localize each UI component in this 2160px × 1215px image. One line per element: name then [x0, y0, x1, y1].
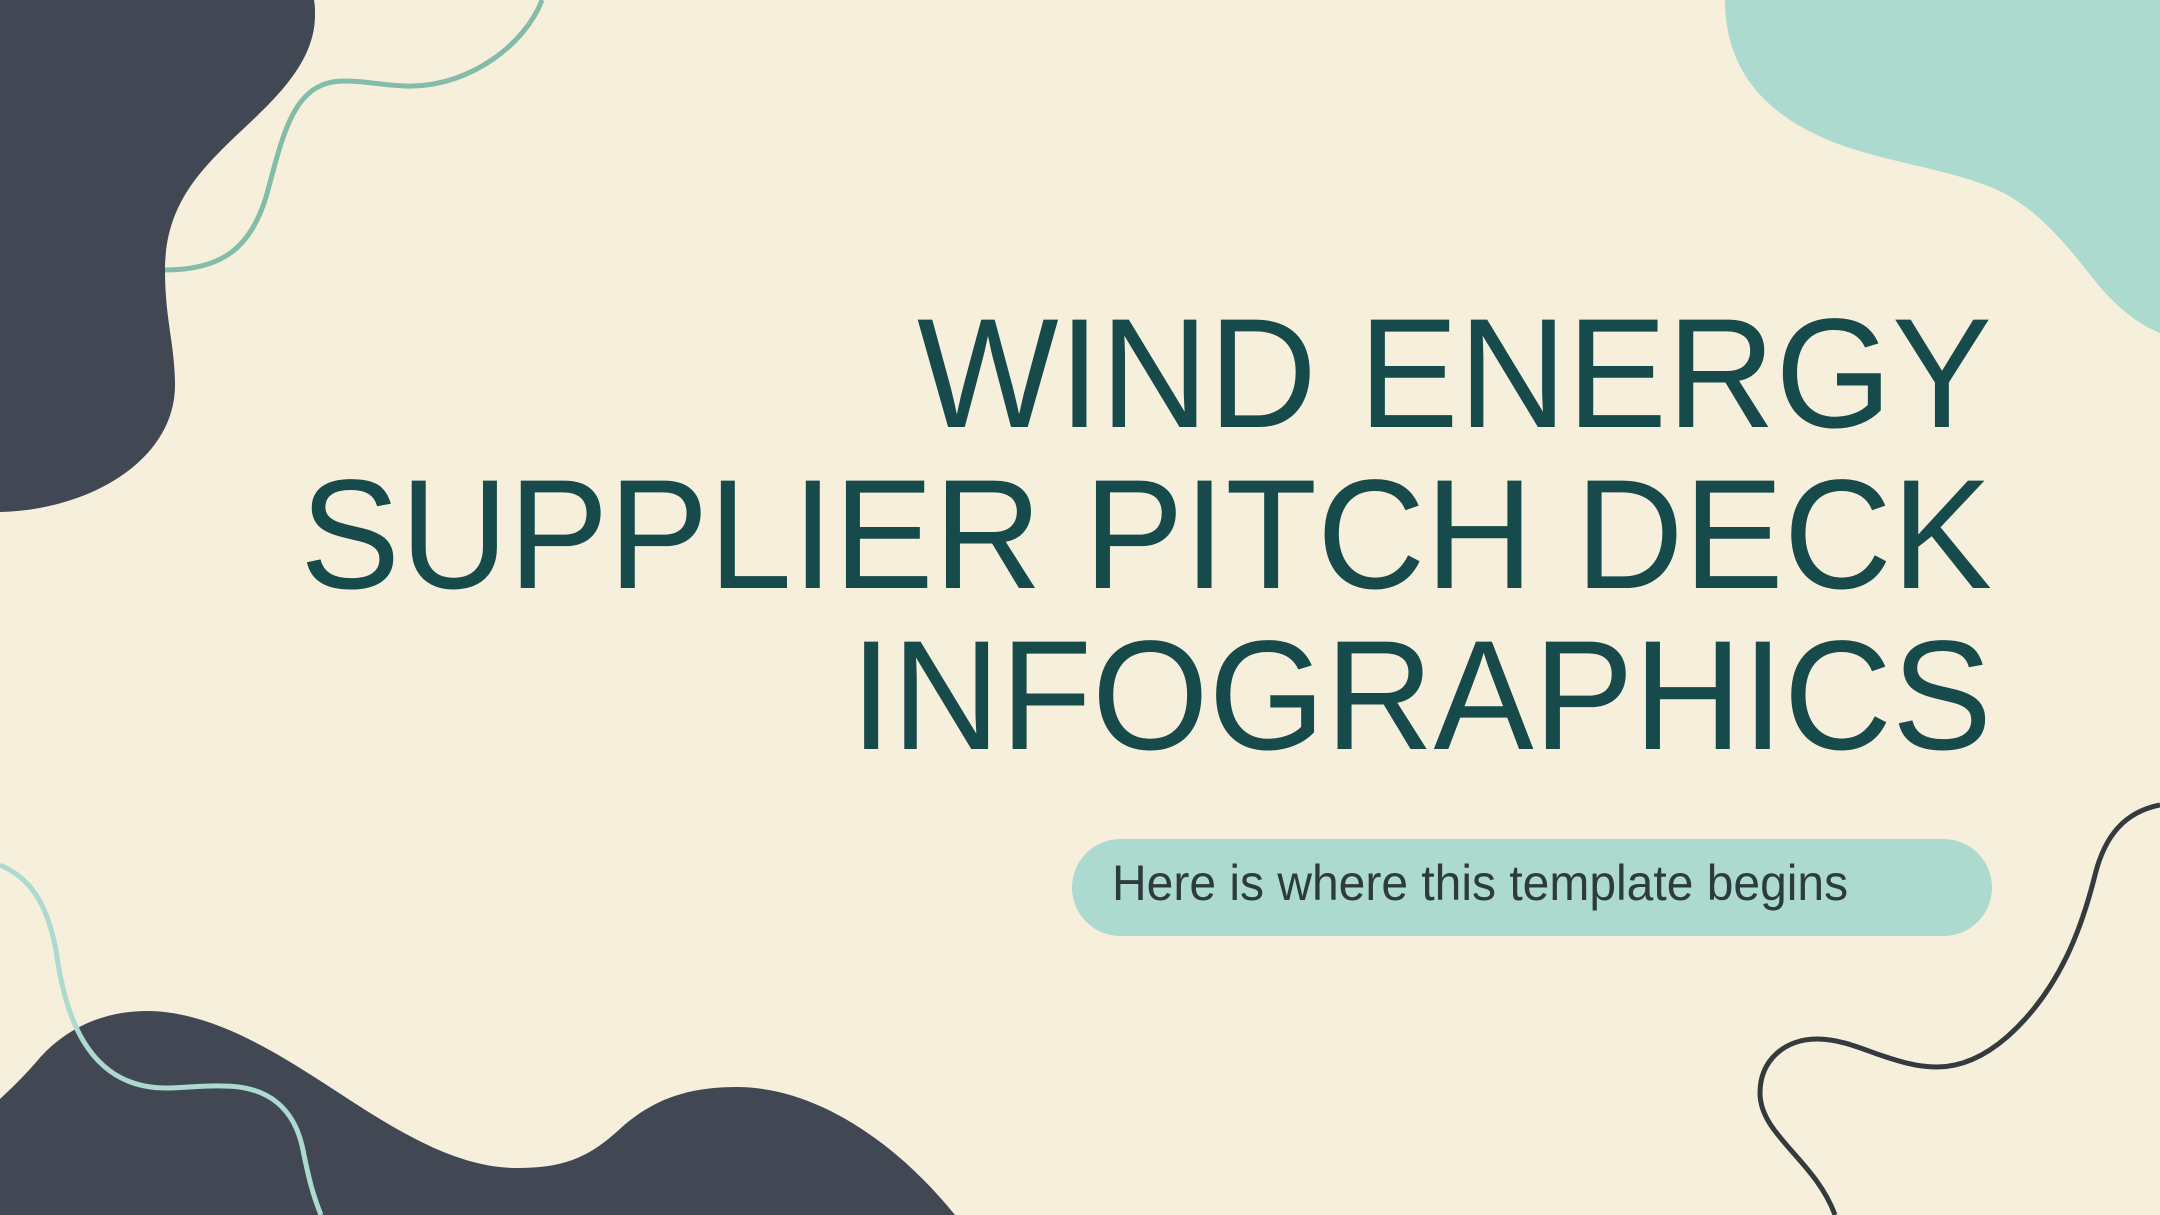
curve: top left green line — [165, 0, 542, 270]
curve: bottom right dark line — [1760, 805, 2160, 1215]
title: INFOGRAPHICS — [850, 608, 1992, 783]
curve: bottom left mint line — [0, 865, 321, 1215]
subtitle pill — [1072, 839, 1992, 936]
blob: bottom left dark — [0, 1011, 955, 1215]
title: SUPPLIER PITCH DECK — [300, 447, 1992, 622]
subtitle text: Here is where this template begins — [1112, 856, 1848, 911]
title — [300, 286, 1992, 783]
blob: top left dark — [0, 0, 315, 512]
blob: top right mint — [1725, 0, 2160, 333]
title: WIND ENERGY — [917, 286, 1992, 461]
pill background — [1072, 839, 1992, 936]
